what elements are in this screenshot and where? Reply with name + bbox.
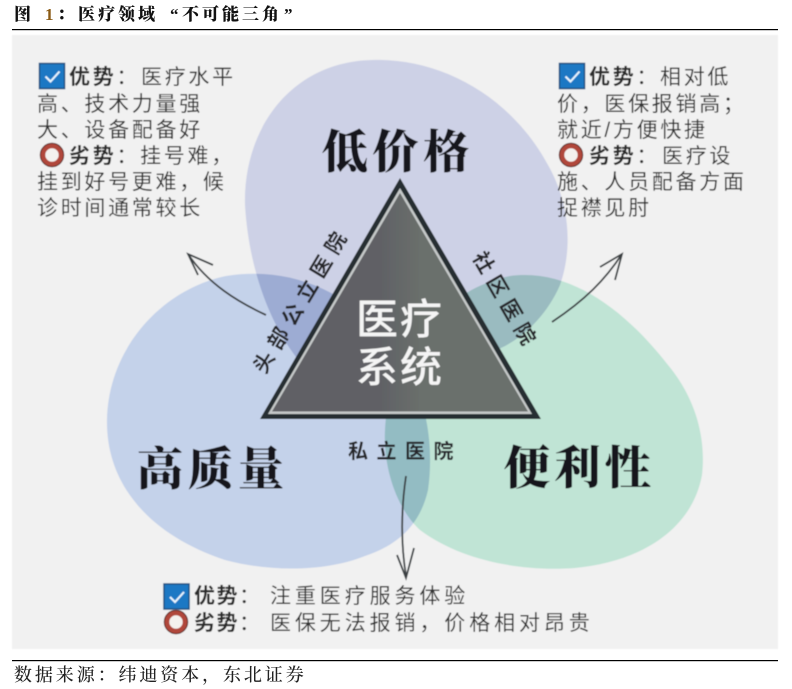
text block: top public hospitals: 优势： <box>69 66 140 89</box>
heading: convenience: 便利性 <box>504 443 656 494</box>
title: 1 <box>45 5 56 24</box>
text block: private hospitals: 优势： <box>194 585 262 608</box>
text block: top public hospitals: 大、设备配备好 <box>37 119 203 142</box>
icon: check <box>560 64 584 88</box>
triangle label: 系统 <box>356 344 444 391</box>
text block: community hospitals <box>557 64 747 220</box>
text block: top public hospitals: 劣势：挂号难， <box>69 145 235 168</box>
text block: top public hospitals: 高、技术力量强 <box>37 93 203 116</box>
text block: community hospitals: 捉襟见肘 <box>557 197 652 220</box>
title: ” <box>284 5 296 24</box>
title: 医疗领域 <box>78 4 158 24</box>
text block: community hospitals: 医疗设 <box>662 145 733 168</box>
blob: convenience <box>385 275 703 569</box>
text block: community hospitals: 就近/方便快捷 <box>557 119 708 142</box>
text block: top public hospitals: 挂到好号更难，候 <box>37 171 227 194</box>
label: top public hospitals: 头部公立医院 <box>249 222 355 378</box>
icon: ring <box>559 143 583 167</box>
text block: top public hospitals: 诊时间通常较长 <box>37 197 203 220</box>
triangle label: 医疗 <box>356 296 444 343</box>
heading: low price: 低价格 <box>322 127 474 178</box>
text block: community hospitals: 价，医保报销高； <box>557 93 747 116</box>
arrow: to bottom text <box>397 476 414 578</box>
title: “ <box>170 5 182 24</box>
icon: check <box>40 64 64 88</box>
text block: private hospitals: 劣势： <box>194 612 262 635</box>
label: community hospitals: 社区医院 <box>468 248 543 355</box>
top rule <box>12 29 778 30</box>
bottom rule <box>12 660 778 661</box>
text block: private hospitals: 医保无法报销，价格相对昂贵 <box>270 612 594 635</box>
title: 图 <box>14 5 34 24</box>
title: ： <box>57 5 77 24</box>
triangle: medical system <box>260 178 541 419</box>
text block: private hospitals: 注重医疗服务体验 <box>270 585 469 608</box>
venn blobs <box>107 60 703 569</box>
text block: community hospitals: 施、人员配备方面 <box>557 171 747 194</box>
label: private hospitals: 私立医院 <box>348 439 462 463</box>
text block: top public hospitals <box>37 64 236 220</box>
arrow: to top-left text <box>188 254 266 315</box>
source note: 数据来源：纬迪资本，东北证券 <box>14 664 307 686</box>
blob: high quality <box>107 274 430 569</box>
icon: ring <box>164 610 188 634</box>
text block: top public hospitals: 医疗水平 <box>141 66 236 89</box>
text block: private hospitals <box>164 584 594 635</box>
arrow: to top-right text <box>552 254 622 322</box>
text block: community hospitals: 劣势： <box>589 145 660 168</box>
text block: community hospitals: 优势： <box>589 66 660 89</box>
icon: check <box>164 584 189 609</box>
text block: community hospitals: 相对低 <box>660 66 731 89</box>
icon: ring <box>40 143 64 167</box>
triangle label <box>356 296 444 391</box>
blob: low price <box>245 60 568 372</box>
title: 不可能三角 <box>182 4 282 24</box>
heading: high quality: 高质量 <box>137 444 288 495</box>
